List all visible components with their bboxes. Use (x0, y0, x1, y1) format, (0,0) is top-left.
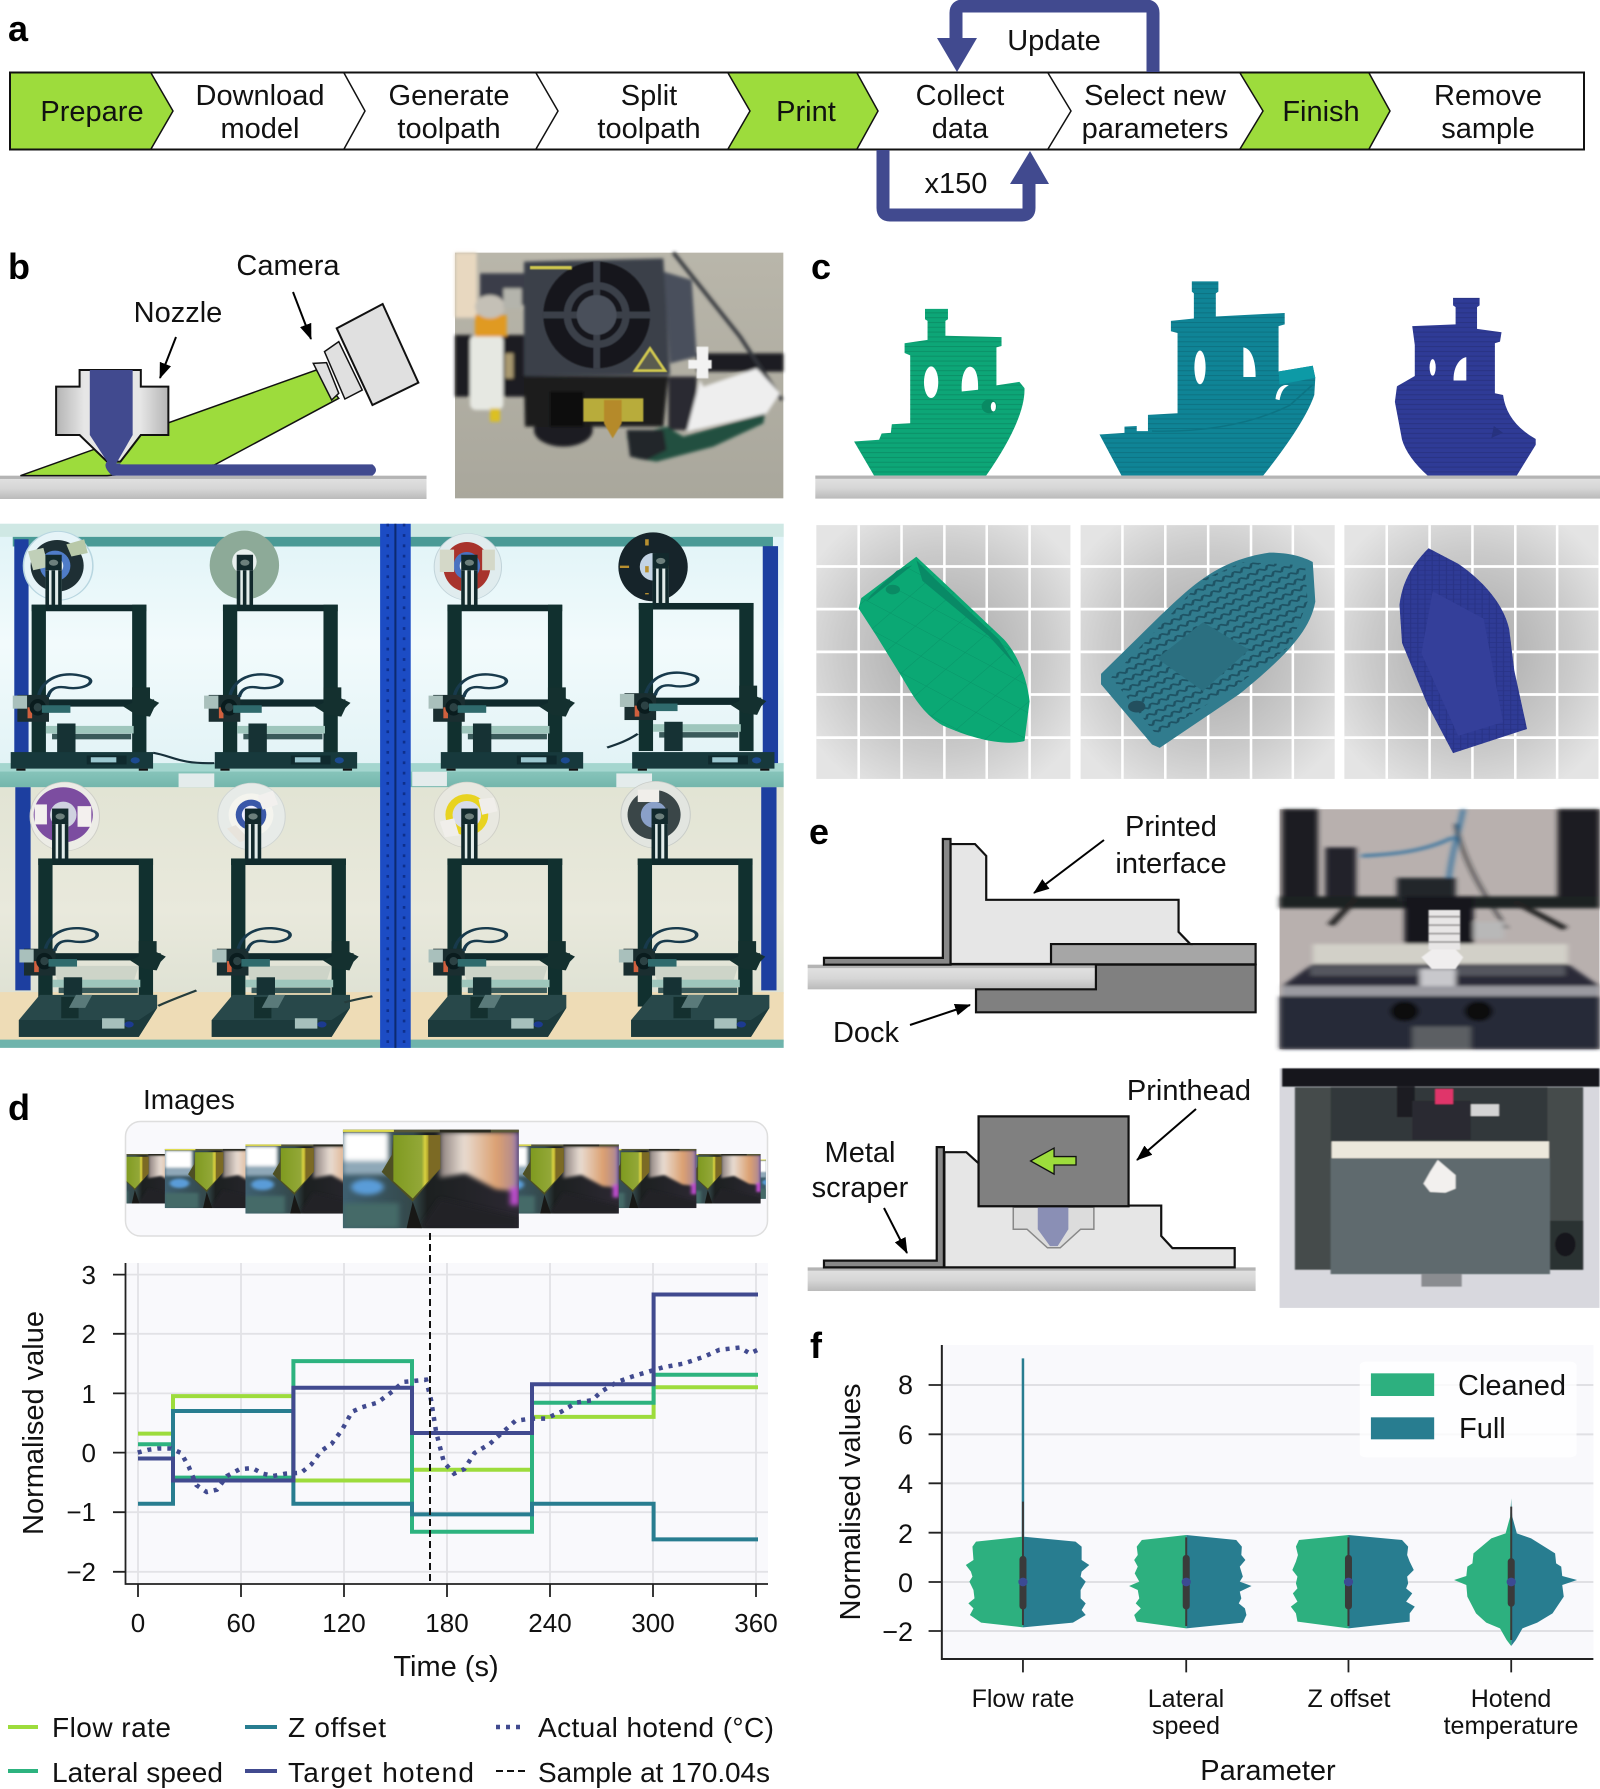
interface label line 2: interface (1115, 848, 1227, 880)
blue boat bottom (1399, 548, 1527, 753)
legend: Sample at 170.04s (538, 1757, 770, 1788)
line chart (18, 1233, 778, 1683)
green boat bottom (859, 557, 1030, 743)
dock label: Dock (833, 1017, 900, 1049)
x tick labels: Flow rate (972, 1685, 1074, 1713)
label b: b (8, 246, 30, 287)
x tick labels: 360 (734, 1608, 778, 1638)
photo: printer farm (0, 524, 784, 1048)
series: actual hotend (138, 1348, 758, 1492)
y tick labels: −1 (66, 1497, 96, 1527)
panel c: printed boats (811, 246, 1600, 779)
images strip (124, 1120, 768, 1237)
green boat (854, 309, 1025, 476)
docked diagram (808, 839, 1256, 1012)
camera label: Camera (236, 250, 340, 282)
workflow bar: data (932, 113, 989, 145)
workflow bar: Split (621, 80, 677, 112)
x axis title: Time (s) (393, 1651, 499, 1683)
panel e: docking schematics (808, 809, 1599, 1308)
series: z offset (138, 1411, 758, 1539)
workflow bar: Collect (916, 80, 1004, 112)
workflow bar (10, 72, 1584, 150)
workflow bar: toolpath (597, 113, 701, 145)
x tick labels: 180 (425, 1608, 469, 1638)
label e: e (809, 811, 829, 852)
blue boat (1395, 298, 1536, 476)
arrow to printhead (1137, 1109, 1196, 1160)
arrow to scraper (884, 1208, 907, 1253)
photo: printhead (455, 253, 783, 498)
workflow bar: toolpath (397, 113, 501, 145)
y tick labels: 2 (898, 1519, 913, 1549)
x tick labels: temperature (1444, 1712, 1578, 1740)
arrow to nozzle (160, 337, 176, 378)
violin: flow rate (966, 1358, 1089, 1627)
arrow to dock (910, 1005, 970, 1025)
label c: c (811, 246, 831, 287)
violin: hotend temperature (1454, 1498, 1577, 1646)
workflow bar: Prepare (40, 96, 144, 128)
photo: front view (1280, 809, 1599, 1049)
y tick labels: 1 (82, 1379, 96, 1409)
panel a: workflow (8, 6, 1584, 215)
y tick labels: 0 (898, 1568, 913, 1598)
x tick labels: 240 (528, 1608, 572, 1638)
series: flow rate (138, 1387, 758, 1480)
plot area (929, 1345, 1593, 1672)
workflow bar: model (220, 113, 300, 145)
legend: Target hotend (288, 1757, 474, 1788)
workflow bar: Finish (1282, 96, 1360, 128)
legend: Lateral speed (52, 1757, 223, 1788)
x150 text: x150 (925, 168, 987, 200)
schematic (0, 304, 427, 499)
x tick labels: 0 (131, 1608, 145, 1638)
scraper label line 2: scraper (812, 1172, 909, 1204)
removal diagram (808, 1116, 1256, 1291)
teal boat (1099, 281, 1315, 476)
x tick labels: Hotend (1471, 1685, 1551, 1713)
y tick labels: 4 (898, 1469, 913, 1499)
arrow: update loop (956, 6, 1153, 72)
x tick labels (131, 1608, 778, 1638)
label d: d (8, 1087, 30, 1128)
y tick labels: 3 (82, 1260, 96, 1290)
legend: Flow rate (52, 1712, 171, 1743)
y tick labels: −2 (66, 1557, 96, 1587)
legend text: cleaned: Cleaned (1458, 1370, 1566, 1402)
y tick labels (66, 1260, 96, 1587)
violin: z offset (1291, 1535, 1415, 1628)
y tick labels (882, 1370, 913, 1647)
arrow to camera (293, 292, 311, 339)
spools (23, 531, 690, 851)
printers (11, 553, 774, 1037)
workflow bar: Select new (1084, 80, 1227, 112)
x tick labels (972, 1685, 1578, 1740)
x tick labels: 60 (227, 1608, 255, 1638)
series: lateral speed (138, 1361, 758, 1532)
printed interface label: Printed (1125, 811, 1217, 843)
x tick labels: 300 (631, 1608, 675, 1638)
photo: top view (1280, 1068, 1599, 1308)
legend text: full: Full (1459, 1413, 1506, 1445)
workflow bar: Remove (1434, 80, 1542, 112)
y tick labels: 6 (898, 1420, 913, 1450)
violin: lateral speed (1129, 1535, 1252, 1628)
arrow head: update (937, 38, 977, 72)
x tick labels: speed (1152, 1712, 1220, 1740)
legend: Z offset (288, 1712, 386, 1743)
x axis title: Parameter (1200, 1755, 1336, 1787)
panel f: violin plot (810, 1325, 1593, 1787)
y axis title: Normalised values (835, 1384, 867, 1620)
workflow bar: parameters (1082, 113, 1228, 145)
update text: Update (1007, 25, 1101, 57)
y tick labels: 2 (82, 1319, 96, 1349)
images heading: Images (143, 1084, 235, 1115)
nozzle label: Nozzle (134, 297, 222, 329)
label a: a (8, 8, 29, 49)
legend box (1360, 1362, 1577, 1457)
panel d: time series (8, 1084, 830, 1788)
y axis title: Normalised value (18, 1311, 50, 1535)
arrow head: x150 (1010, 151, 1049, 184)
legend (8, 1712, 774, 1788)
label f: f (810, 1325, 823, 1366)
metal scraper label: Metal (825, 1137, 895, 1169)
x tick labels: 120 (322, 1608, 366, 1638)
y tick labels: 0 (82, 1438, 96, 1468)
x tick labels: Z offset (1308, 1685, 1391, 1713)
y tick labels: 8 (898, 1370, 913, 1400)
workflow bar: Print (776, 96, 836, 128)
side views of boats (815, 281, 1600, 499)
workflow bar: sample (1441, 113, 1535, 145)
legend: Actual hotend (°C) (538, 1712, 774, 1743)
series: target hotend (138, 1294, 758, 1480)
bottom views of boats (816, 525, 1598, 779)
x tick labels: Lateral (1148, 1685, 1224, 1713)
y tick labels: −2 (882, 1617, 913, 1647)
workflow bar: Download (196, 80, 324, 112)
panel b: nozzle and camera schematic (0, 246, 783, 499)
arrow: x150 loop (883, 150, 1029, 215)
workflow bar: Generate (389, 80, 509, 112)
printhead label: Printhead (1127, 1075, 1251, 1107)
sample marker (429, 1233, 431, 1584)
arrow to interface (1034, 840, 1104, 893)
teal boat bottom (1101, 553, 1315, 748)
